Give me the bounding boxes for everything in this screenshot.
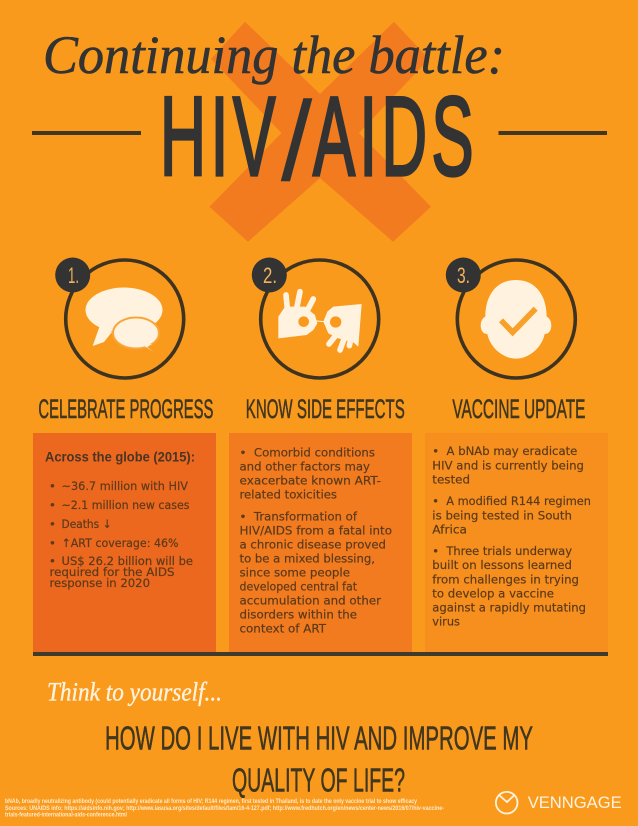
step 3 icon: head with check (446, 258, 575, 378)
panel 2 text: a chronic disease proved (240, 538, 386, 552)
heading 1: CELEBRATE PROGRESS (38, 394, 213, 424)
panel 2 text: and other factors may (240, 460, 370, 474)
main title: / (281, 79, 313, 204)
main title: AIDS (313, 74, 478, 199)
panel 3 text: HIV and is currently being (432, 458, 584, 472)
badge 1: 1. (68, 263, 79, 288)
icon: small bubble (113, 318, 159, 352)
icon: signing hands (278, 292, 362, 350)
script prompt: Think to yourself... (47, 678, 222, 706)
icon: check mark (501, 309, 536, 332)
main title (160, 74, 478, 204)
question line 2: QUALITY OF LIFE? (232, 763, 405, 800)
panel 2 text: related toxicities (240, 488, 337, 502)
icon: head (481, 280, 551, 359)
panel 1 bullets: US$ 26.2 billion will be (62, 554, 193, 568)
panel 3 text: Africa (432, 522, 467, 536)
title block (32, 25, 607, 204)
panel 3 text (432, 444, 591, 628)
section headings (38, 394, 585, 424)
step 1 icon: speech bubbles (55, 258, 184, 378)
venngage logo (496, 792, 622, 814)
panel 3 text: • Three trials underway (432, 544, 572, 558)
panel 3 text: is being tested in South (432, 508, 572, 522)
panel 2 text: disorders within the (240, 608, 357, 622)
panel 2 text: • Transformation of (240, 510, 358, 524)
panel 2 text: context of ART (240, 622, 327, 636)
panel 1 bullets: required for the AIDS (50, 565, 174, 579)
panel 3 text: built on lessons learned (432, 558, 572, 572)
panel 3 text: virus (432, 614, 460, 628)
panel 3 text: • A modified R144 regimen (432, 494, 591, 508)
panel 1 bullets: ~2.1 million new cases (62, 498, 190, 512)
closing prompt (47, 678, 533, 800)
panel 1 heading: Across the globe (2015): (45, 448, 195, 464)
panel 2 text: developed central fat (240, 580, 357, 594)
panel 1 bullets (49, 479, 193, 590)
main title: HIV (160, 74, 280, 199)
panel: vaccine update (425, 433, 608, 653)
panel 2 text: • Comorbid conditions (240, 446, 375, 460)
panel 1 bullets: ↑ART coverage: 46% (62, 536, 178, 550)
title rule right (498, 131, 607, 135)
panel 2 text: to be a mixed blessing, (240, 552, 375, 566)
panel 1 bullets: • (49, 536, 56, 550)
panel 1 bullets: • (49, 479, 56, 493)
panel 3 text: • A bNAb may eradicate (432, 444, 577, 458)
panel 2 text: since some people (240, 566, 350, 580)
footnotes and sources: bNAb, broadly neutralizing antibody (could potentially eradicate all forms of HIV; R144 regimen, first tested in Thailand, is to date the only vaccine trial to show efficacy (5, 799, 418, 805)
panel base rule (33, 652, 608, 656)
footnotes and sources: trials-featured-international-aids-conference.html (5, 813, 127, 819)
venngage wordmark: VENNGAGE (528, 793, 622, 812)
panel 3 text: to develop a vaccine (432, 586, 554, 600)
panel: side effects (229, 433, 412, 653)
panel 1 bullets: response in 2020 (50, 576, 150, 590)
panel 1 bullets: Deaths ↓ (62, 517, 112, 531)
decorative X behind title (210, 22, 431, 242)
panel 2 text (240, 446, 392, 636)
badge 3: 3. (457, 263, 470, 288)
panel 3 text: tested (432, 472, 470, 486)
icon: venngage mark (496, 792, 518, 814)
panel 2 text: accumulation and other (240, 594, 381, 608)
title rule left (32, 131, 141, 135)
badge 2: 2. (263, 263, 277, 288)
footnotes and sources (5, 799, 444, 819)
panel 2 text: exacerbate known ART- (240, 474, 381, 488)
heading 2: KNOW SIDE EFFECTS (246, 394, 405, 424)
footnotes and sources: Sources: UNAIDS info; https://aidsinfo.nih.gov; http://www.iasusa.org/sites/default/files/tam/16-4-127.pdf; http://www.fredhutch.org/en/news/center-news/2016/07/hiv-vaccine- (5, 806, 444, 812)
step 2 icon: hands (252, 258, 379, 378)
panel 1 bullets: • (49, 517, 56, 531)
panel 1 bullets: • (49, 498, 56, 512)
panel 2 text: HIV/AIDS from a fatal into (240, 524, 392, 538)
panel 1 bullets: ~36.7 million with HIV (62, 479, 188, 493)
script title: Continuing the battle: (43, 25, 505, 85)
icon: large bubble (86, 288, 162, 346)
panel: across the globe (33, 433, 216, 653)
panel 3 text: from challenges in trying (432, 572, 579, 586)
panel 1 bullets: • (49, 554, 56, 568)
panel 3 text: against a rapidly mutating (432, 600, 586, 614)
